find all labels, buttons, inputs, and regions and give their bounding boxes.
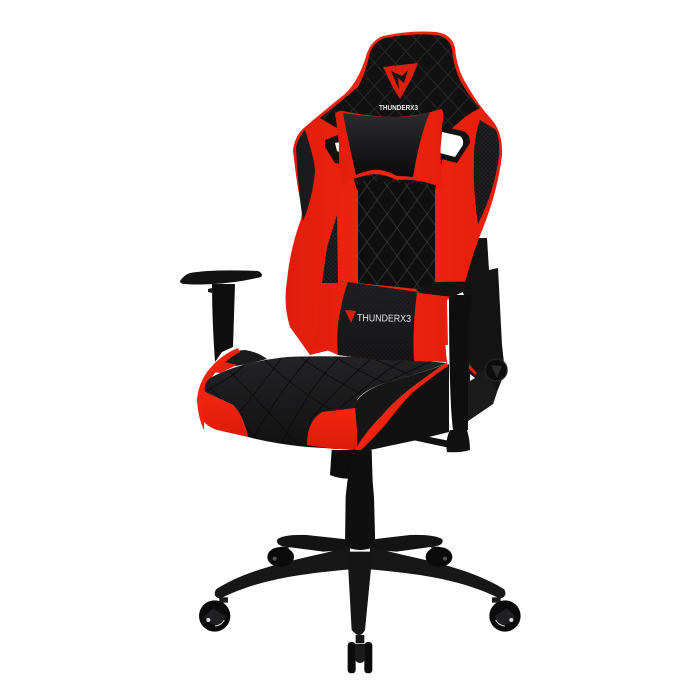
rear right arm	[373, 535, 443, 552]
rear right caster	[426, 547, 452, 567]
left wedge	[322, 215, 338, 283]
front center caster	[348, 635, 372, 673]
under-seat strap	[408, 434, 450, 448]
seat red stripe	[355, 362, 448, 451]
front right arm	[370, 546, 505, 599]
lumbar brand text: THUNDERX3	[357, 313, 412, 325]
base: gas lift and star base	[199, 450, 521, 673]
seat center red front	[307, 408, 357, 449]
seat side black panel	[355, 364, 449, 452]
neck pillow black center	[343, 112, 430, 177]
seat	[197, 348, 449, 452]
seat small red wedge	[212, 362, 237, 373]
rear left caster	[267, 547, 294, 567]
recline bracket	[468, 369, 497, 421]
headrest brand text: THUNDERX3	[379, 105, 418, 112]
small red seat edge behind frame	[469, 364, 477, 375]
right side black panel	[474, 120, 499, 224]
height adjustment cylinder	[330, 450, 358, 479]
seat rear-left bump	[221, 350, 267, 368]
left side black panel	[296, 130, 315, 221]
headrest quilted panel	[320, 34, 480, 190]
seat quilted cushion	[205, 356, 447, 450]
gas lift	[345, 450, 375, 550]
white gap in the frame	[470, 374, 475, 381]
illustration: gaming chair	[180, 32, 521, 674]
seat quilting lines	[207, 357, 430, 445]
front right caster	[489, 597, 521, 632]
seat bolster top	[355, 363, 448, 452]
seat outer red trim	[197, 348, 240, 430]
center quilted column	[358, 180, 435, 295]
front left caster	[199, 597, 230, 632]
recline knob	[485, 359, 507, 381]
backrest shell	[286, 32, 502, 355]
lumbar logo mark	[345, 310, 356, 323]
knob emblem	[491, 365, 502, 378]
rear left arm	[277, 535, 347, 552]
neck pillow	[335, 109, 443, 187]
right headrest belt slot	[438, 126, 470, 163]
right armrest	[416, 282, 497, 452]
lumbar pillow	[313, 282, 447, 362]
left headrest belt slot	[325, 135, 343, 164]
seat left red front	[202, 392, 248, 437]
back frame and recline mechanism	[408, 238, 507, 448]
front center arm	[347, 552, 373, 635]
front left arm	[215, 546, 350, 599]
headrest logo mark	[383, 63, 418, 99]
left armrest	[180, 270, 262, 362]
lumbar black center	[337, 282, 417, 361]
